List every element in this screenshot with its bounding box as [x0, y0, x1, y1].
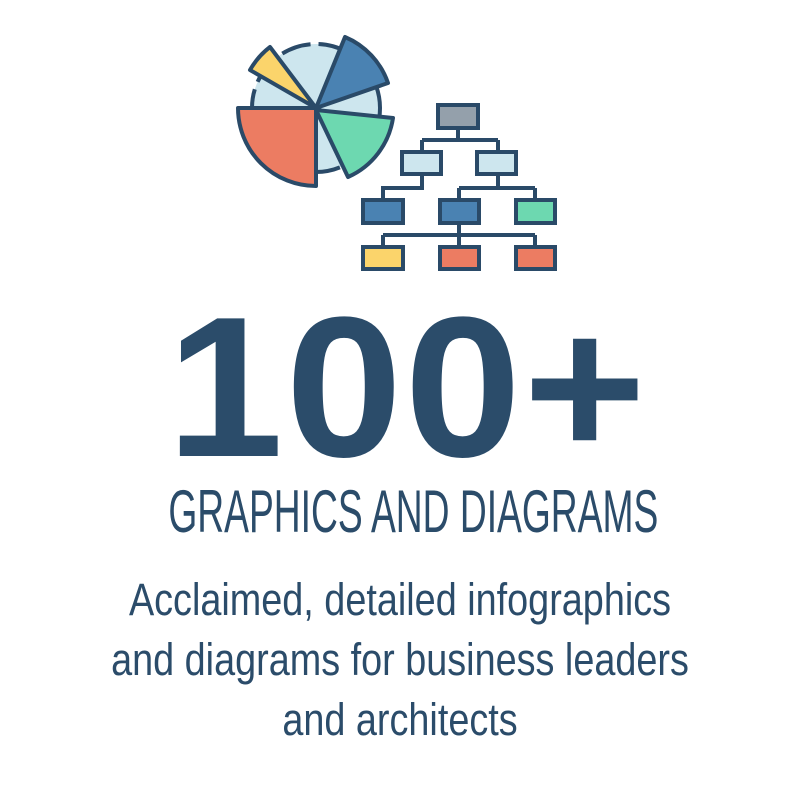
description text: Acclaimed, detailed infographics — [129, 574, 671, 625]
icon: org chart — [361, 103, 557, 271]
icon: pie chart — [236, 34, 395, 188]
description text: and diagrams for business leaders — [111, 634, 689, 685]
subtitle: GRAPHICS AND DIAGRAMS — [168, 478, 658, 545]
headline number: 100+ — [167, 276, 648, 499]
description text — [111, 574, 689, 745]
description text: and architects — [282, 694, 518, 745]
